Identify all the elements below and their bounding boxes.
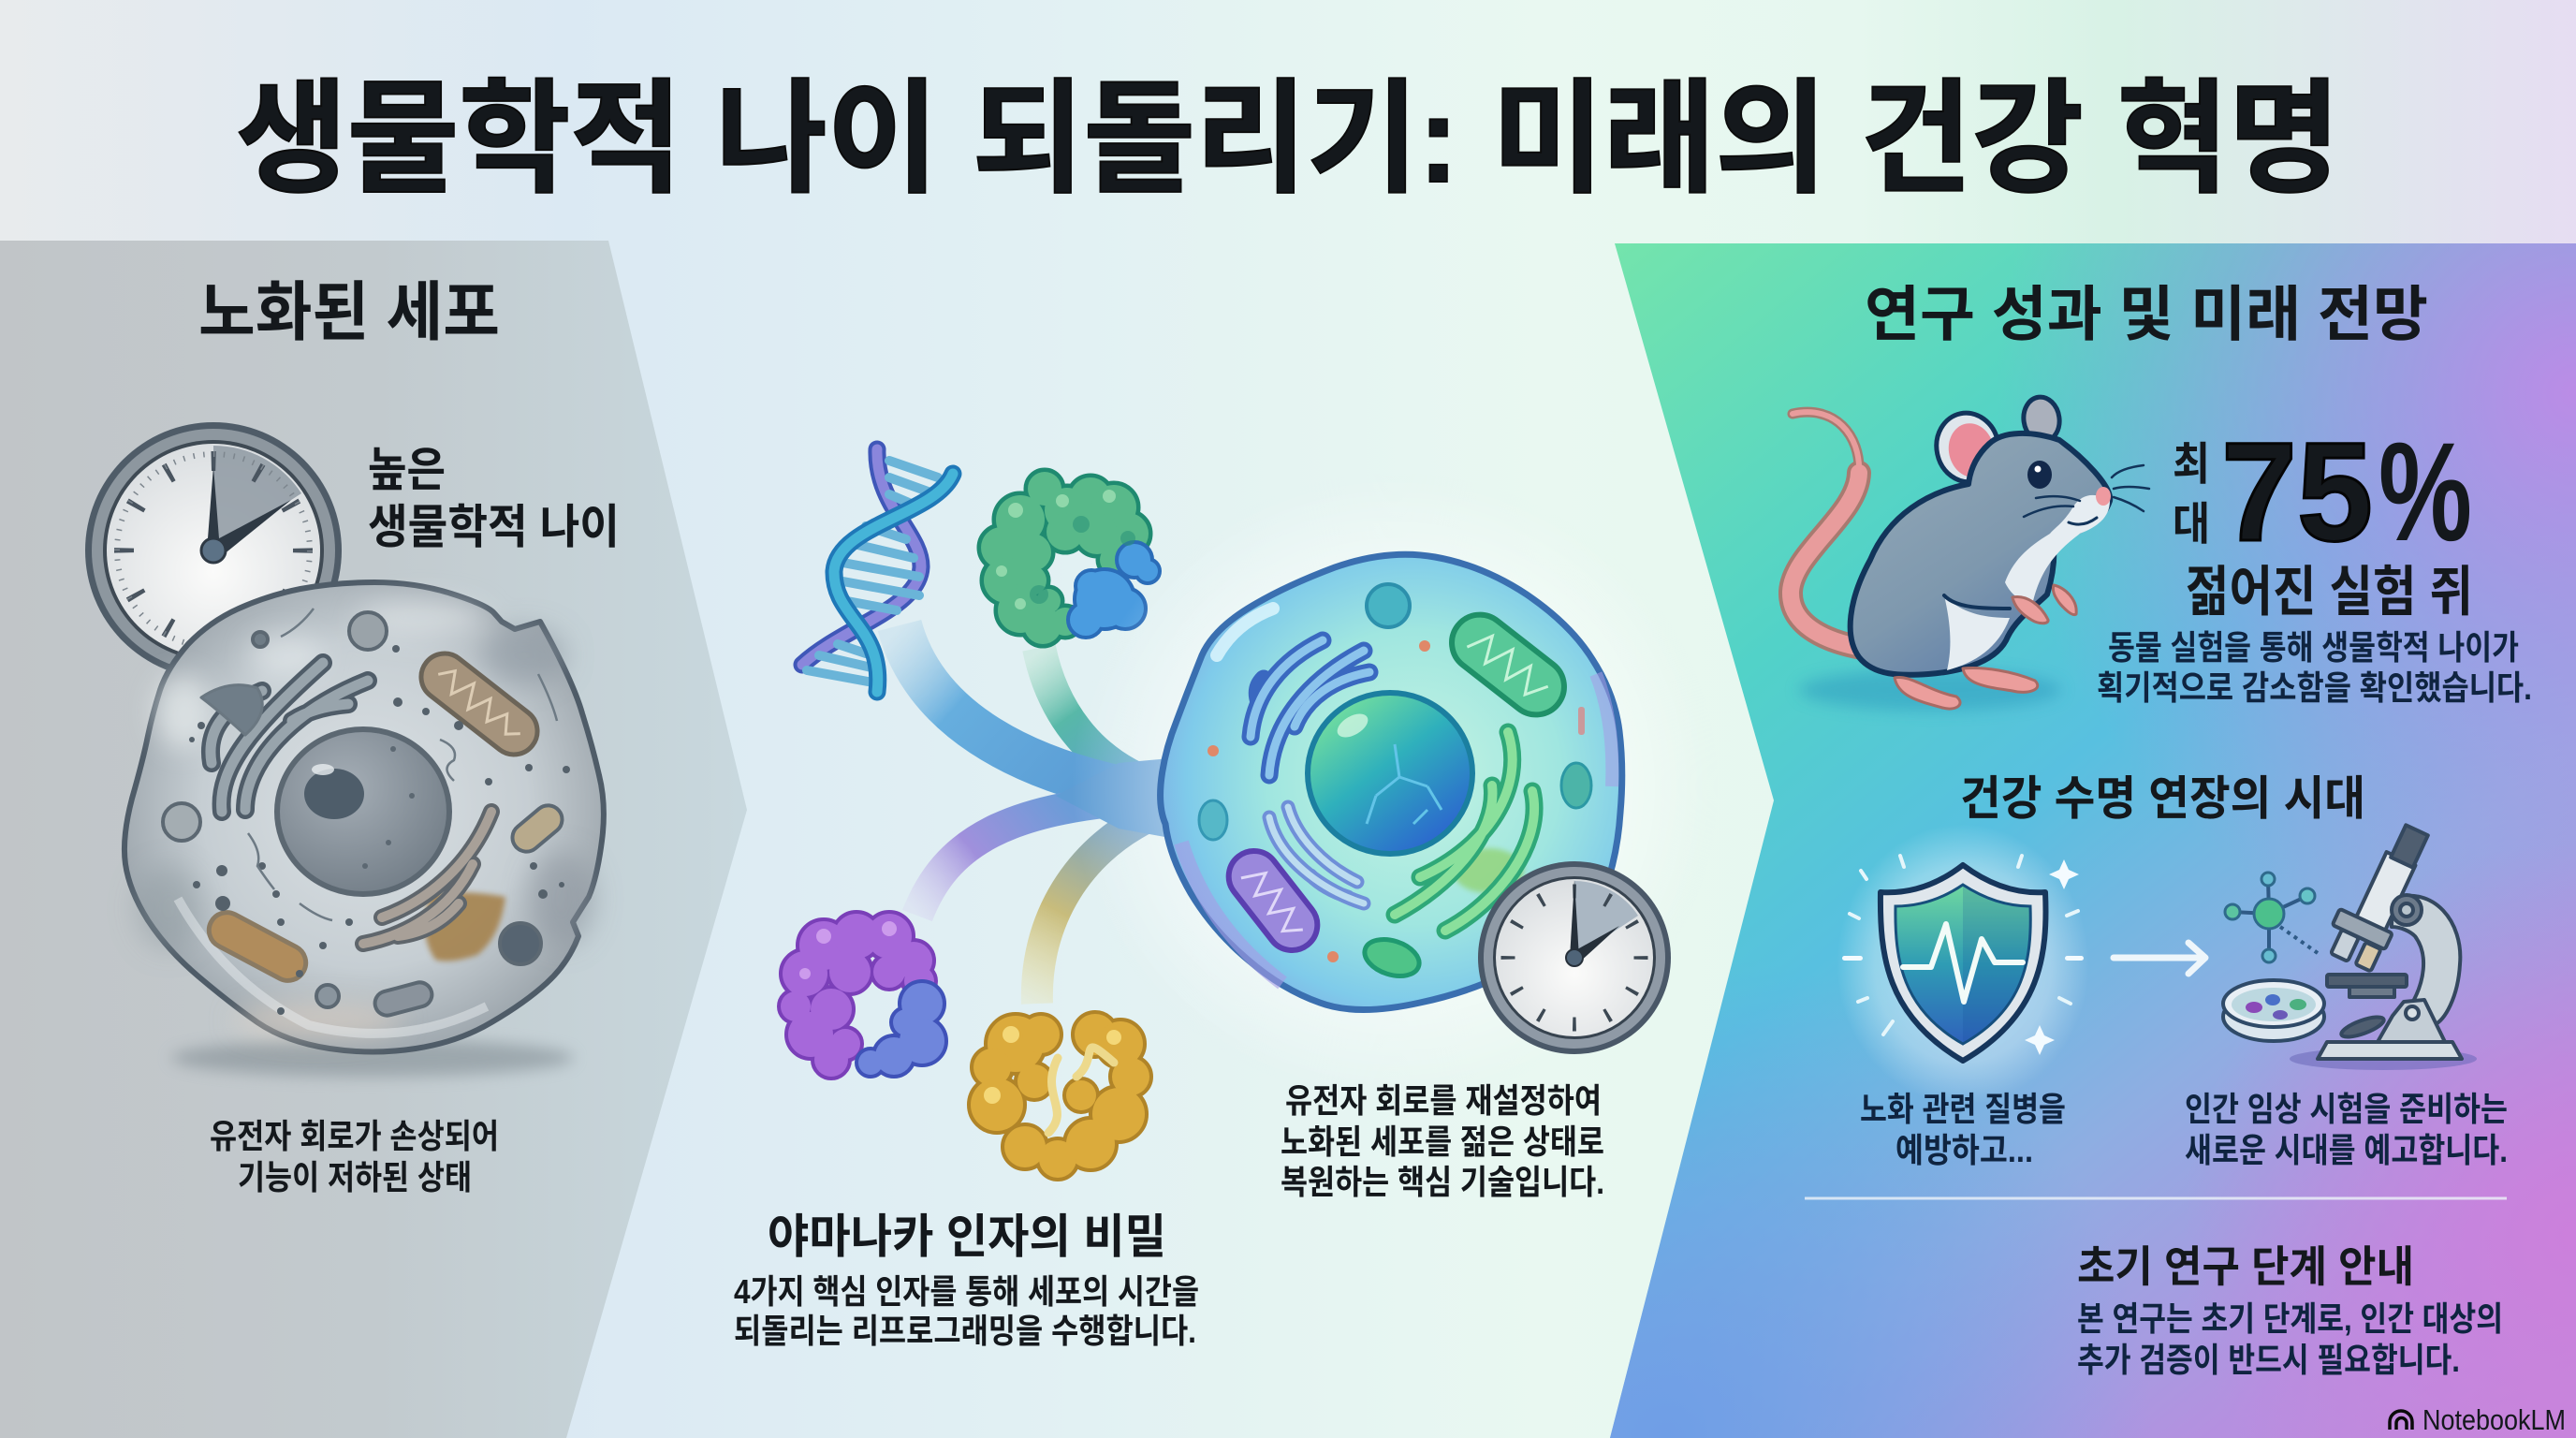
organelle: grey golgi bbox=[201, 663, 368, 812]
mouse white chest and belly bbox=[1944, 495, 2110, 670]
text: mouse result: 획기적으로 감소함을 확인했습니다. bbox=[2097, 668, 2532, 707]
heading: Yamanaka: 야마나카 인자의 비밀 bbox=[768, 1211, 1166, 1263]
text: early stage notice: 본 연구는 초기 단계로, 인간 대상의 bbox=[2077, 1299, 2503, 1338]
caption: reset circuit bbox=[1281, 1081, 1604, 1201]
stat: 75%: % bbox=[2378, 413, 2472, 570]
mouse ears bbox=[1930, 395, 2062, 488]
caption: disease prevention: 노화 관련 질병을 bbox=[1860, 1090, 2066, 1128]
mouse tail bbox=[1791, 412, 1867, 649]
stat: up to bbox=[2173, 440, 2210, 550]
organelles: vesicles bbox=[163, 612, 568, 1019]
illustration: mouse bbox=[1791, 395, 2149, 711]
organelle: mitochondrion bbox=[412, 644, 547, 764]
text: reprogramming: 되돌리는 리프로그래밍을 수행합니다. bbox=[734, 1312, 1196, 1350]
mouse details bbox=[1944, 465, 2149, 609]
icon: old clock bbox=[85, 422, 342, 679]
organelle: pale endoplasmic reticulum bbox=[1269, 807, 1364, 903]
text: mouse result bbox=[2097, 628, 2532, 707]
icon: green protein bbox=[981, 472, 1158, 644]
caption: damaged state: 유전자 회로가 손상되어 bbox=[210, 1117, 499, 1155]
title: 생물학적 나이 되돌리기: 미래의 건강 혁명 bbox=[236, 70, 2340, 208]
caption: damaged state bbox=[210, 1117, 499, 1196]
illustration: aged cell bbox=[124, 582, 604, 1077]
heading: aged cell: 노화된 세포 bbox=[198, 276, 500, 348]
caption: reset circuit: 복원하는 핵심 기술입니다. bbox=[1281, 1163, 1604, 1201]
debris dots bbox=[189, 645, 570, 1015]
panel: results and outlook bbox=[1610, 243, 2576, 1438]
label: high biological age bbox=[368, 444, 620, 553]
glow behind the cell bbox=[1072, 473, 1718, 1100]
organelles: vesicles bbox=[1199, 584, 1591, 982]
caption: clinical trials: 인간 임상 시험을 준비하는 bbox=[2185, 1090, 2508, 1128]
caption: clinical trials bbox=[2185, 1090, 2508, 1169]
wiggly filaments bbox=[248, 609, 557, 920]
icon: young clock bbox=[1478, 861, 1671, 1054]
icon: molecule bbox=[2225, 873, 2318, 962]
sparkles and rays bbox=[1842, 859, 2084, 1055]
stat label: 젊어진 실험 쥐 bbox=[2186, 562, 2473, 623]
panel: Yamanaka factors bbox=[734, 449, 1199, 1350]
organelle: blue golgi bbox=[1251, 640, 1369, 775]
stat: up to: 대 bbox=[2173, 500, 2210, 550]
heading: results: 연구 성과 및 미래 전망 bbox=[1865, 281, 2428, 348]
text: early stage notice: 추가 검증이 반드시 필요합니다. bbox=[2077, 1341, 2460, 1379]
arrow bbox=[2114, 943, 2205, 974]
organelle: brown golgi and stain bbox=[363, 812, 505, 961]
icon: gold protein bbox=[971, 1014, 1149, 1178]
heading: early stage notice: 초기 연구 단계 안내 bbox=[2077, 1242, 2414, 1291]
caption: damaged state: 기능이 저하된 상태 bbox=[238, 1158, 472, 1196]
panel: rejuvenated cell bbox=[1072, 473, 1718, 1201]
organelle: aged nucleus bbox=[277, 729, 449, 894]
icon: petri dish bbox=[2223, 980, 2324, 1041]
mottled cytoplasm bbox=[136, 599, 594, 1037]
flow arrows converging bbox=[900, 625, 1170, 1004]
text: reprogramming bbox=[734, 1272, 1199, 1350]
label: high biological age: 생물학적 나이 bbox=[368, 501, 620, 553]
organelle: green mitochondrion bbox=[1441, 603, 1575, 726]
organelle: purple mitochondrion bbox=[1219, 841, 1327, 961]
panel: aged cell bbox=[0, 241, 747, 1438]
illustration: young cell bbox=[1161, 554, 1622, 1009]
text: reprogramming: 4가지 핵심 인자를 통해 세포의 시간을 bbox=[734, 1272, 1199, 1311]
text: mouse result: 동물 실험을 통해 생물학적 나이가 bbox=[2108, 628, 2519, 667]
icon: DNA helix bbox=[802, 449, 953, 692]
text: early stage notice bbox=[2077, 1299, 2503, 1379]
caption: clinical trials: 새로운 시대를 예고합니다. bbox=[2185, 1131, 2508, 1169]
organelle: worn mitochondrion bbox=[203, 906, 312, 987]
organelle: green endoplasmic reticulum bbox=[1395, 732, 1534, 931]
stat: up to: 최 bbox=[2173, 440, 2210, 490]
organelle: nucleus bbox=[1308, 693, 1472, 854]
caption: reset circuit: 유전자 회로를 재설정하여 bbox=[1285, 1081, 1602, 1120]
caption: disease prevention bbox=[1860, 1090, 2066, 1169]
caption: disease prevention: 예방하고... bbox=[1895, 1131, 2033, 1169]
heading: healthspan: 건강 수명 연장의 시대 bbox=[1960, 772, 2365, 825]
stat: 75%: 75 bbox=[2221, 413, 2373, 570]
mouse feet bbox=[1895, 585, 2076, 709]
icon: microscope bbox=[2290, 825, 2477, 1070]
panel shape: left chevron bbox=[0, 241, 747, 1438]
icon: purple protein bbox=[781, 914, 944, 1077]
stat: 75% bbox=[2221, 413, 2472, 570]
panel shape: right chevron bbox=[1610, 243, 2576, 1438]
label: high biological age: 높은 bbox=[368, 444, 446, 496]
caption: reset circuit: 노화된 세포를 젊은 상태로 bbox=[1281, 1123, 1604, 1161]
icon: shield bbox=[1837, 824, 2089, 1105]
